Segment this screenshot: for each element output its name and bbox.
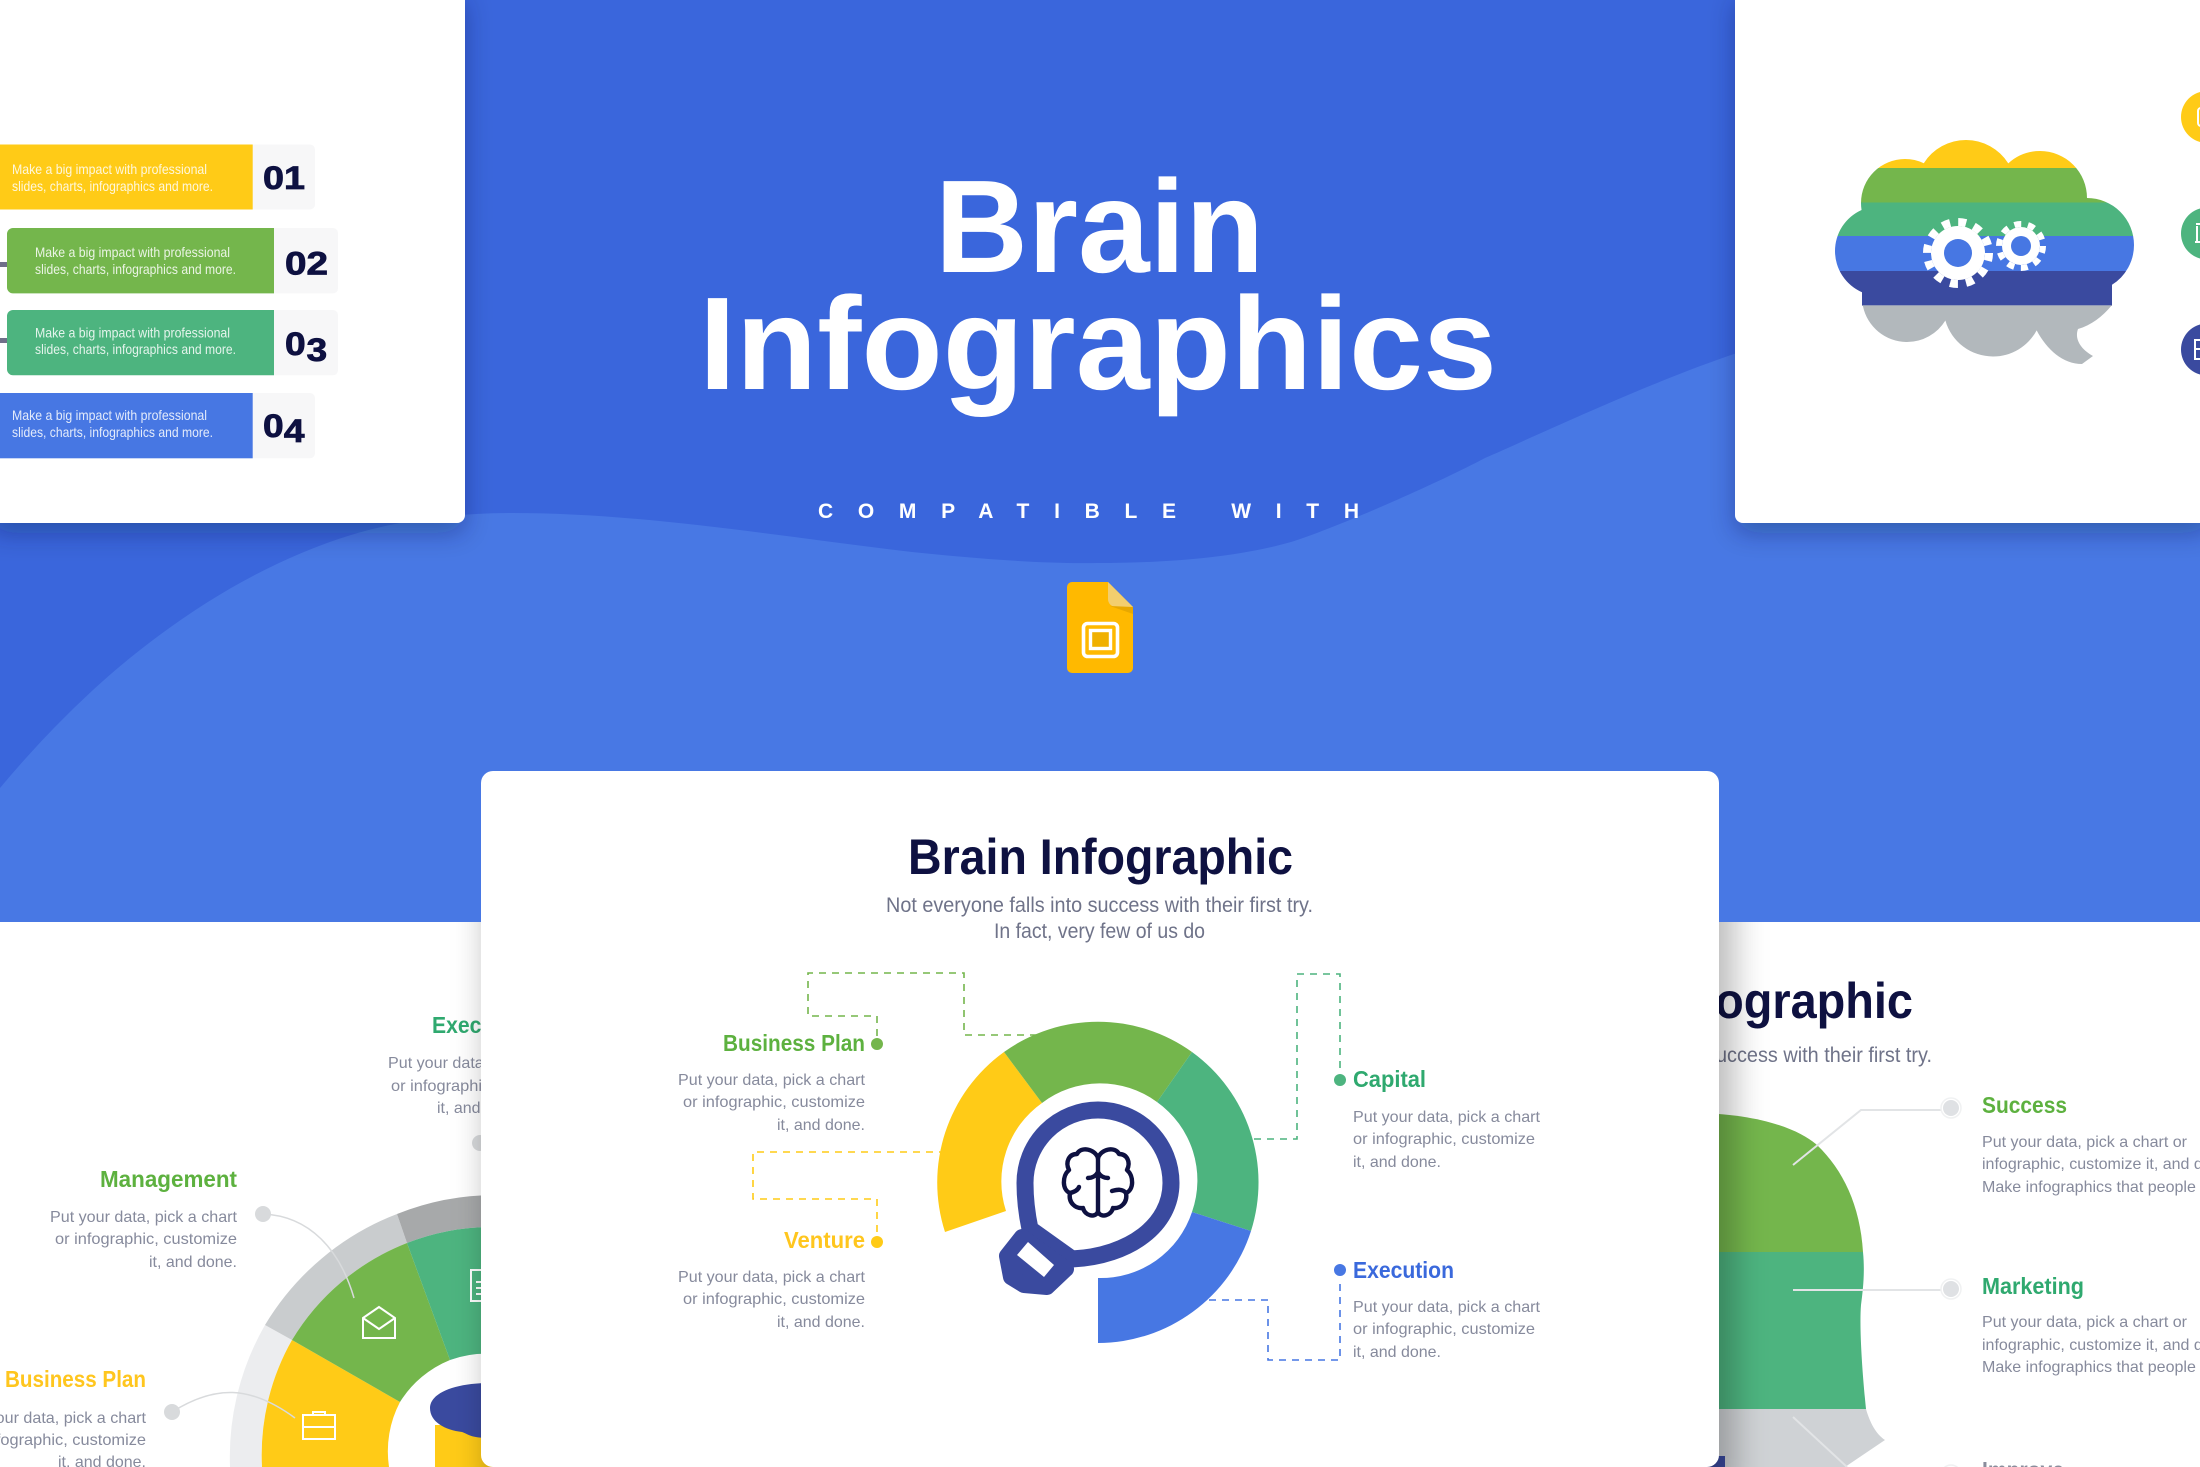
main title xyxy=(699,153,1497,417)
text: business plan (left slide) xyxy=(0,1366,147,1467)
text: management: or infographic, customize xyxy=(55,1231,237,1248)
connector: success xyxy=(1793,1098,1961,1165)
dashed connector: execution xyxy=(1205,1284,1340,1360)
label: venture: it, and done. xyxy=(777,1314,865,1331)
icon: document xyxy=(471,1270,500,1301)
text: execution xyxy=(388,1012,576,1117)
text: marketing xyxy=(1982,1273,2200,1376)
text: execution: it, and done. xyxy=(437,1100,525,1117)
label: execution: or infographic, customize xyxy=(1353,1321,1535,1338)
icon: brain xyxy=(1064,1149,1132,1215)
label: capital xyxy=(1334,1066,1541,1171)
text: success xyxy=(1982,1092,2200,1196)
label: venture: or infographic, customize xyxy=(683,1291,865,1308)
label: business plan: it, and done. xyxy=(777,1117,865,1134)
text: management: it, and done. xyxy=(149,1254,237,1271)
label: capital: Put your data, pick a chart xyxy=(1353,1109,1541,1126)
list row 01: slides, charts, infographics and more. xyxy=(12,178,213,194)
title: Brain Infographic xyxy=(1525,973,1913,1029)
label: capital: it, and done. xyxy=(1353,1154,1441,1171)
list row 03: 03 xyxy=(285,327,327,368)
cloud with colour stripes xyxy=(1835,140,2134,364)
panel: right head slide xyxy=(1504,922,2200,1467)
dashed connector: venture xyxy=(753,1152,945,1232)
subtitle: In fact, very few of us do xyxy=(994,920,1205,943)
compatible with label: COMPATIBLE WITH xyxy=(818,500,1359,523)
icon: green circle xyxy=(2181,208,2200,260)
panel: central brain infographic slide xyxy=(481,771,1719,1467)
label: business plan xyxy=(678,1030,883,1134)
list row 02: 02 xyxy=(285,246,328,282)
text: execution: Execution xyxy=(432,1012,533,1038)
coloured segments xyxy=(262,1227,495,1467)
connector stubs xyxy=(0,262,8,343)
list row 02 xyxy=(7,228,338,293)
text: business plan (left slide): Business Plan xyxy=(5,1366,146,1392)
list row 02: Make a big impact with professional xyxy=(35,244,230,260)
panel: numbered list slide xyxy=(0,0,465,523)
text: execution: Put your data, pick a chart xyxy=(388,1055,576,1072)
icon: google slides xyxy=(1067,582,1133,673)
label: execution: Execution xyxy=(1353,1257,1454,1283)
list row 04 xyxy=(0,393,315,458)
list row 04: 04 xyxy=(263,409,305,449)
label: execution: it, and done. xyxy=(1353,1344,1441,1361)
connector dot: execution xyxy=(472,1135,488,1151)
list row 04: Make a big impact with professional xyxy=(12,407,207,423)
text: marketing: Put your data, pick a chart or xyxy=(1982,1314,2188,1331)
donut chart xyxy=(937,1022,1259,1343)
label: business plan: or infographic, customize xyxy=(683,1094,865,1111)
connector: marketing xyxy=(1793,1279,1961,1299)
text: success: Put your data, pick a chart or xyxy=(1982,1134,2188,1151)
text: marketing: Marketing xyxy=(1982,1273,2084,1299)
list row 01 xyxy=(0,144,315,210)
list row 02: slides, charts, infographics and more. xyxy=(35,261,236,277)
label: execution xyxy=(1334,1257,1541,1361)
card shadow on side panels xyxy=(468,922,1752,1467)
main title: Infographics xyxy=(699,270,1497,417)
list row 03 xyxy=(7,310,338,375)
icon: small gear xyxy=(1999,224,2043,268)
outer grey ring xyxy=(230,1195,495,1467)
label: business plan: Put your data, pick a chart xyxy=(678,1072,866,1089)
icon: navy circle xyxy=(2181,324,2200,376)
subtitle xyxy=(886,894,1313,943)
head chart xyxy=(1690,1113,1885,1467)
head centre xyxy=(430,1383,495,1467)
connector: management xyxy=(255,1206,354,1298)
text: management: Management xyxy=(100,1166,237,1192)
label: venture xyxy=(678,1227,883,1331)
label: business plan: Business Plan xyxy=(723,1030,865,1056)
list row 01: 01 xyxy=(263,160,305,196)
connector: improve xyxy=(1793,1417,1961,1467)
text: execution: or infographic, customize xyxy=(391,1078,573,1095)
icon: briefcase xyxy=(303,1412,335,1439)
label: capital: Capital xyxy=(1353,1066,1426,1092)
label: venture: Venture xyxy=(784,1227,865,1253)
icon: yellow circle xyxy=(2181,91,2200,143)
background wave xyxy=(0,330,2200,940)
list row 04: slides, charts, infographics and more. xyxy=(12,424,213,440)
title: Brain Infographic xyxy=(908,829,1293,885)
panel: left semi-circle slide xyxy=(0,922,576,1467)
icon: large gear xyxy=(1927,222,1989,284)
list row 01: Make a big impact with professional xyxy=(12,161,207,177)
label: capital: or infographic, customize xyxy=(1353,1131,1535,1148)
label: execution: Put your data, pick a chart xyxy=(1353,1299,1541,1316)
text: success: Success xyxy=(1982,1092,2067,1118)
subtitle: Not everyone falls into success with their first try. xyxy=(1504,1044,1932,1067)
text: management: Put your data, pick a chart xyxy=(50,1209,238,1226)
dashed connector: capital xyxy=(1250,974,1340,1139)
text: management xyxy=(50,1166,238,1271)
list row 03: Make a big impact with professional xyxy=(35,324,230,340)
list row 03: slides, charts, infographics and more. xyxy=(35,341,236,357)
dashed connector: business plan xyxy=(808,973,1040,1036)
connector: business plan xyxy=(164,1392,295,1420)
icon: light bulb xyxy=(1007,1110,1171,1287)
main title: Brain xyxy=(935,153,1264,300)
subtitle: Not everyone falls into success with their first try. xyxy=(886,894,1313,917)
label: venture: Put your data, pick a chart xyxy=(678,1269,866,1286)
panel: thought cloud slide xyxy=(1735,0,2200,523)
icon: envelope xyxy=(363,1307,395,1338)
